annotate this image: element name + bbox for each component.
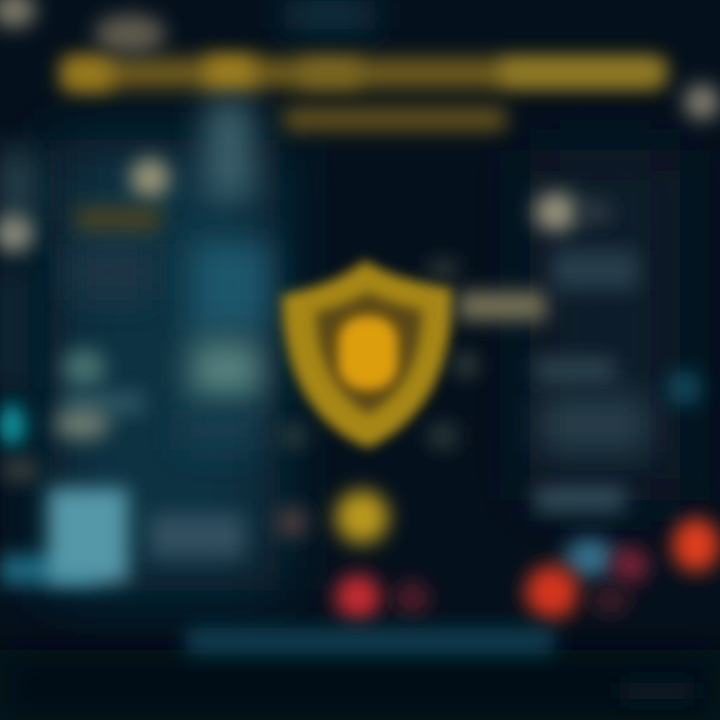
title [62, 56, 665, 90]
icon: red cluster lower right [525, 518, 720, 619]
icon: shield [282, 260, 452, 448]
top decorative blobs [0, 0, 720, 120]
panel: right column [534, 192, 702, 512]
icon: red circle centre [335, 574, 381, 620]
panel: left text blocks [54, 158, 170, 440]
bottom band [185, 628, 555, 654]
panel: central pillar [180, 100, 270, 450]
text block: lower centre left [150, 514, 244, 558]
panel: bright lower left block [0, 488, 128, 585]
panel: left column [0, 150, 40, 482]
icon: yellow circle [335, 490, 389, 544]
icon: dark red circle [395, 581, 429, 615]
bottom right mark [620, 682, 694, 700]
callout: shield label [458, 292, 546, 320]
subtitle [284, 108, 506, 130]
icon: cyan dot [0, 403, 24, 447]
icon: muted red circle [276, 506, 308, 538]
shield rays [280, 262, 476, 447]
